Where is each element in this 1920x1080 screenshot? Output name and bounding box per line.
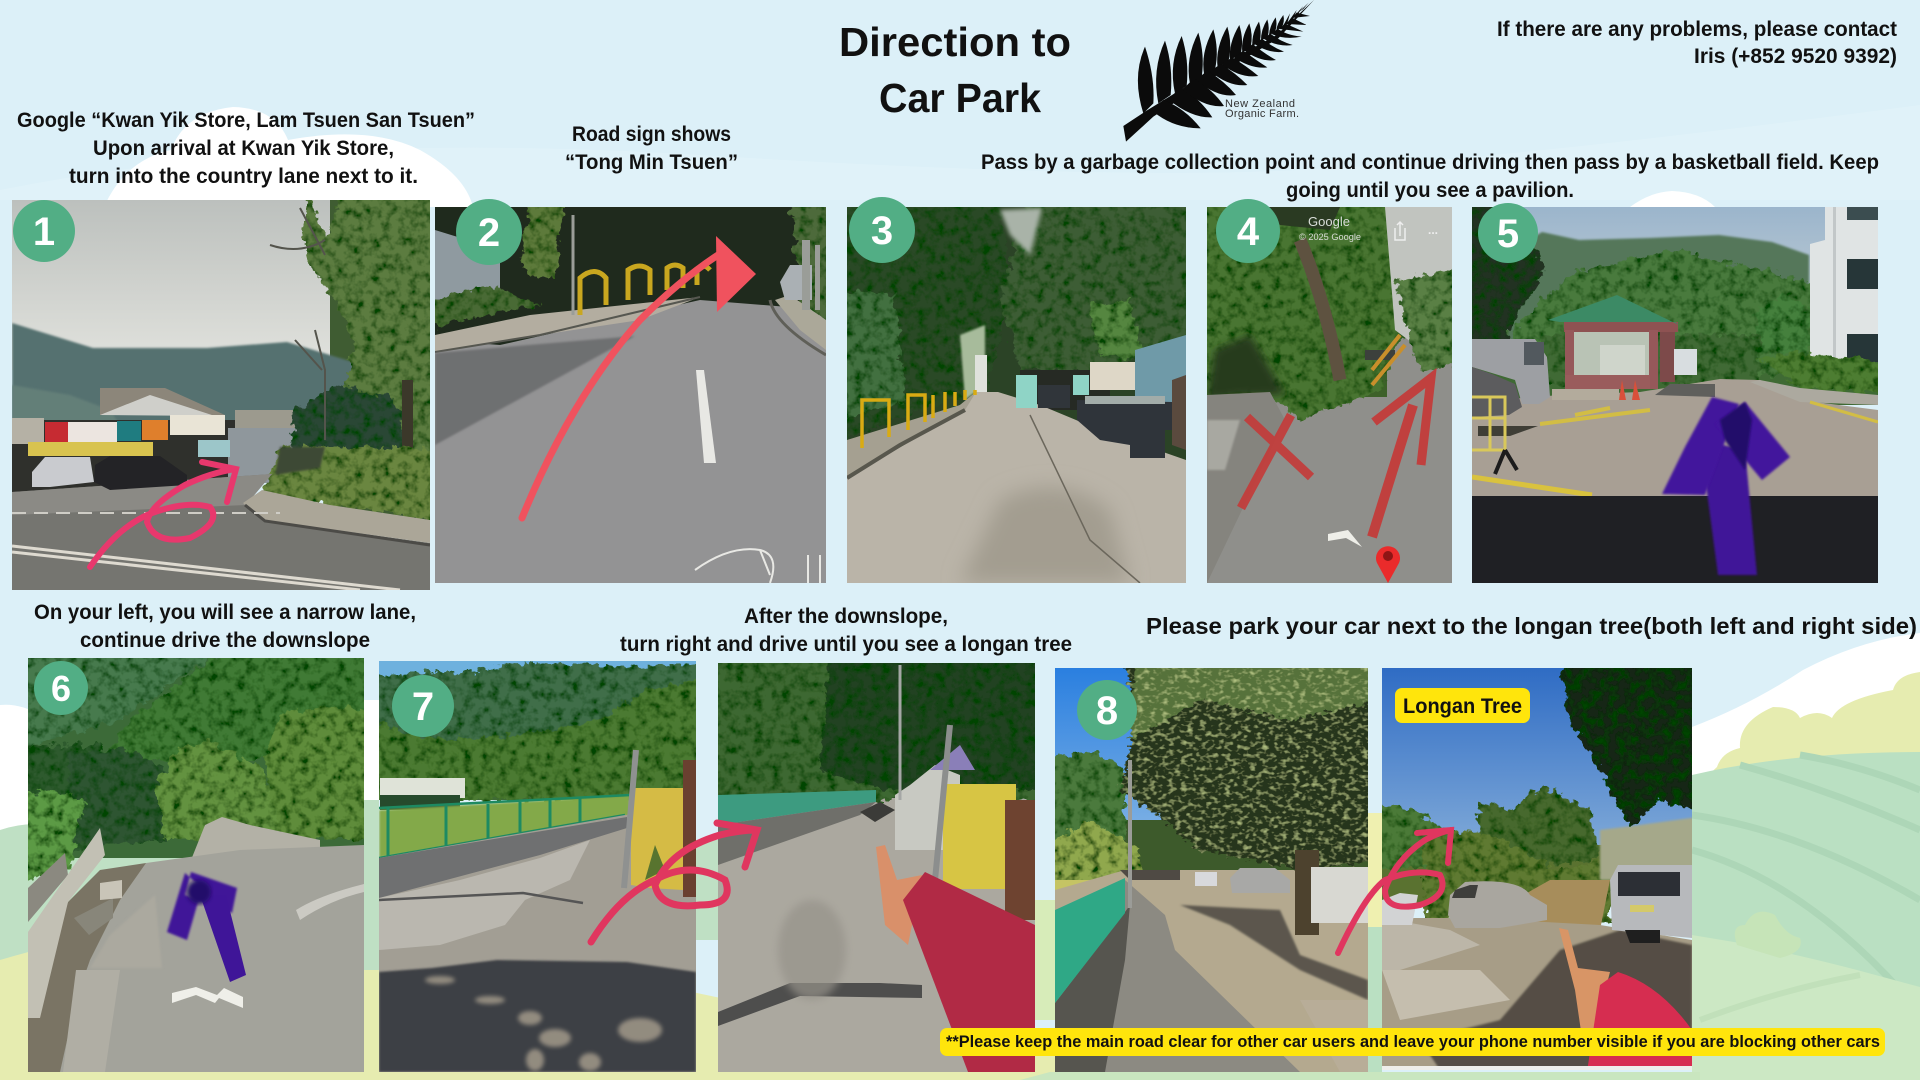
photo 4: street view fork [1207,207,1452,583]
photo 5: pavilion [1472,207,1878,583]
step badge 1: 1 [33,210,55,254]
step 7 instructions [620,605,1072,656]
step badge 3: 3 [871,209,893,253]
photo 2: road sign lane [435,207,826,583]
logo: fern: Organic Farm. [1225,108,1299,120]
steps 3-5 instructions [981,151,1879,202]
step badge 1 [13,200,75,262]
step badge 4 [1216,199,1280,263]
step badge 6 [34,661,88,715]
steps 3-5 instructions: Pass by a garbage collection point and continue driving then pass by a basketball field. Keep [981,151,1879,174]
photo 9: parking area [1382,668,1692,1070]
title: Car Park [879,75,1041,121]
step badge 7: 7 [412,685,434,729]
contact text: Iris (+852 9520 9392) [1694,45,1897,68]
photo 6: narrow lane [28,658,364,1072]
step badge 4: 4 [1237,210,1260,254]
parking reminder banner: **Please keep the main road clear for other car users and leave your phone number visible if you are blocking other cars [946,1033,1880,1051]
step 6 instructions: continue drive the downslope [80,629,370,652]
step 6 instructions [34,601,416,652]
step 2 instructions [565,123,738,174]
step 1 instructions [17,109,475,188]
pink arrow: step 8 [1338,830,1451,953]
contact text [1497,18,1897,68]
title [839,19,1071,121]
step 7 instructions: After the downslope, [744,605,948,628]
step badge 2: 2 [478,211,500,255]
pavilion structure [1548,295,1679,389]
longan tree label [1395,688,1530,723]
step 2 instructions: Road sign shows [572,123,731,146]
photo 4: street view fork: Google [1308,214,1350,229]
logo: fern [1123,0,1314,142]
step badge 5 [1478,203,1538,263]
parking reminder banner [940,1028,1885,1056]
step badge 5: 5 [1497,212,1519,256]
photo 4: street view fork: ... [1428,223,1438,237]
step badge 2 [456,199,522,265]
pink arrow: step 1 [90,462,236,567]
step badge 3 [849,197,915,263]
step 1 instructions: turn into the country lane next to it. [69,165,418,188]
title: Direction to [839,19,1071,65]
step badge 7 [392,675,454,737]
photo 7b: turn right view [718,663,1035,1072]
step 1 instructions: Google “Kwan Yik Store, Lam Tsuen San Tsuen” [17,109,475,132]
logo: fern: New Zealand [1225,98,1295,110]
longan tree label: Longan Tree [1403,695,1522,718]
step 8 instructions: Please park your car next to the longan tree(both left and right side) [1146,613,1917,639]
contact text: If there are any problems, please contact [1497,18,1897,41]
photo 8: longan tree road [1055,668,1368,1072]
step badge 6: 6 [51,668,71,709]
photo 1: store junction [12,200,430,590]
pink arrow: step 7 [591,823,757,942]
step 7 instructions: turn right and drive until you see a longan tree [620,633,1072,656]
photo 4: street view fork: © 2025 Google [1299,232,1361,242]
step 6 instructions: On your left, you will see a narrow lane, [34,601,416,624]
step badge 8 [1077,680,1137,740]
step 2 instructions: “Tong Min Tsuen” [565,151,738,174]
steps 3-5 instructions: going until you see a pavilion. [1286,179,1574,202]
step 1 instructions: Upon arrival at Kwan Yik Store, [93,137,394,160]
photo 3: garbage collection point [847,207,1186,583]
step badge 8: 8 [1096,689,1118,733]
photo 7: downslope view [379,661,696,1072]
